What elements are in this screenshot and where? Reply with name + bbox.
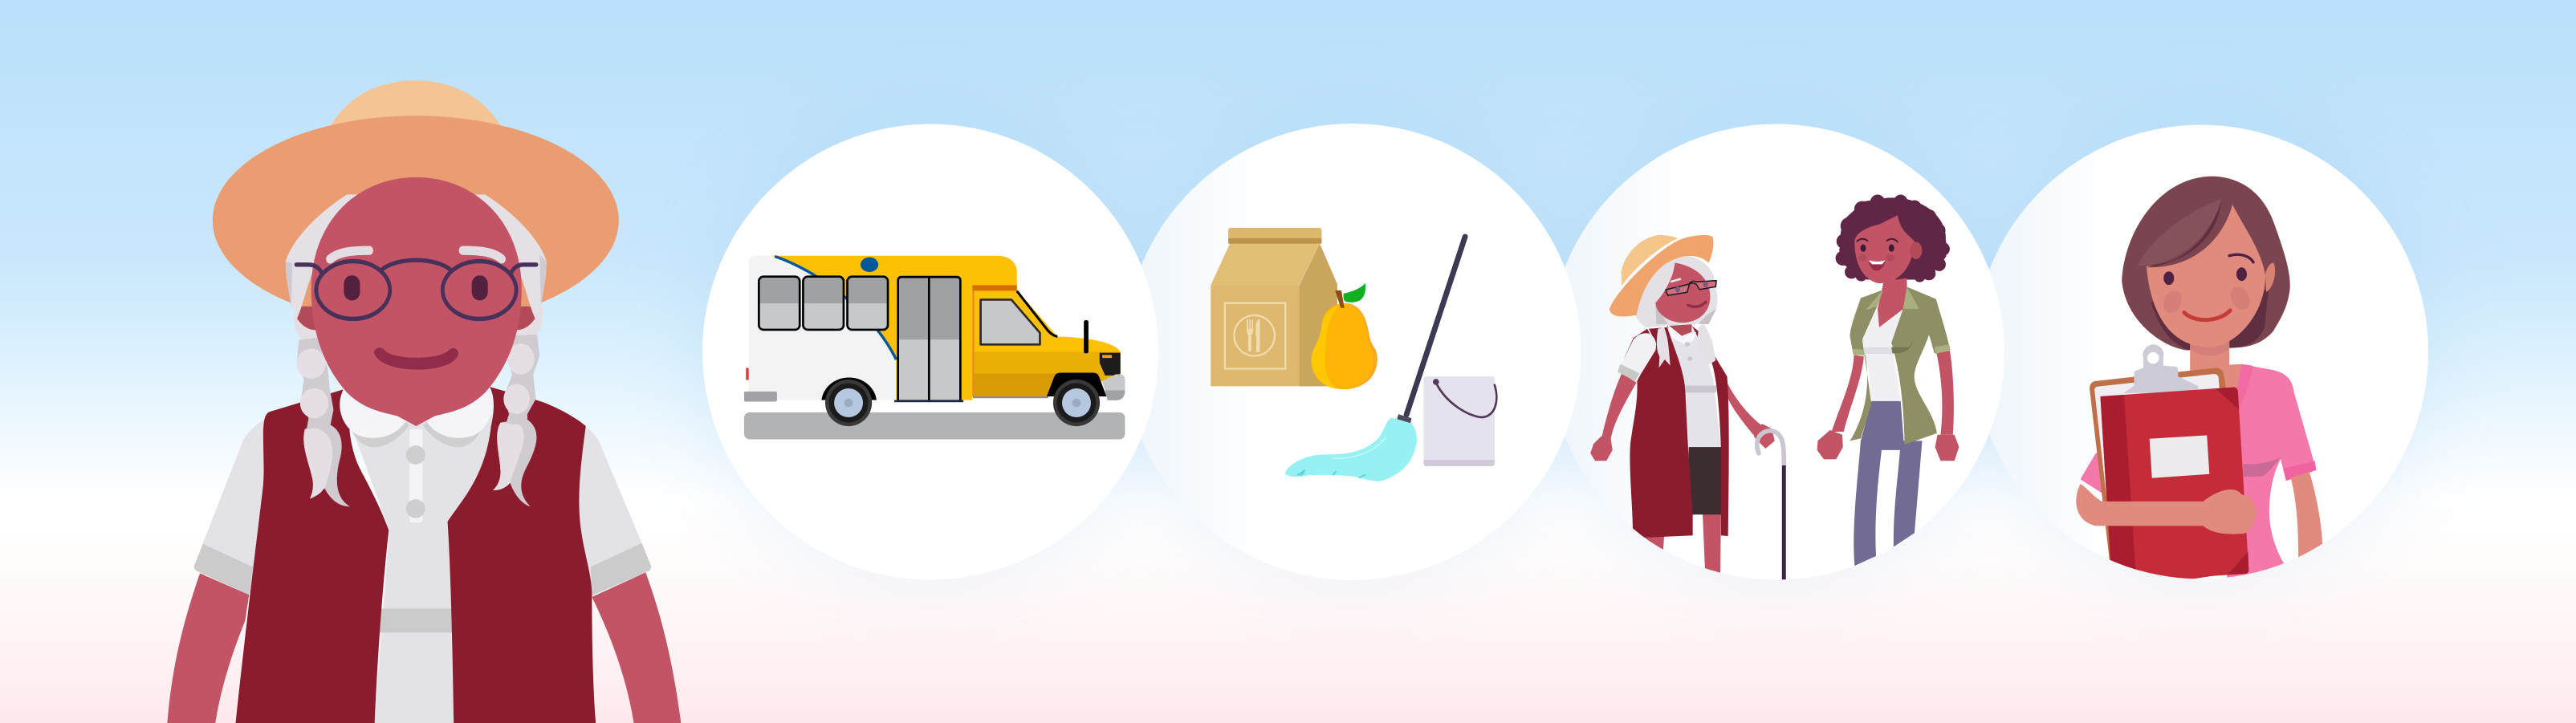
windows [759, 277, 888, 330]
eyebrows [330, 250, 502, 259]
icon: pear [1311, 283, 1378, 389]
eyes [344, 275, 488, 300]
illustration: nurse with binder [2076, 177, 2322, 582]
collar [340, 390, 492, 447]
icon: meal bag [1211, 228, 1337, 386]
shirt [194, 414, 651, 723]
road [744, 412, 1125, 440]
right braid [493, 307, 543, 506]
panel: circle 2 meals and housekeeping [1124, 124, 1581, 580]
figure: older woman with cane [1590, 235, 1784, 580]
soft glow behind circles [714, 123, 2418, 556]
illustration: meal bag, pear, mop and bucket [1211, 228, 1496, 481]
hair and ears [286, 194, 547, 330]
door [894, 277, 963, 402]
mouth [374, 347, 458, 370]
hat brim [213, 116, 619, 325]
panel: circle 1 transport [702, 124, 1158, 579]
hat crown [331, 80, 501, 126]
illustration: older woman and caregiver [1590, 195, 1959, 580]
face [311, 177, 522, 426]
vest [235, 387, 596, 723]
illustration: yellow shuttle bus [744, 256, 1125, 440]
icon: bucket [1423, 376, 1496, 466]
panel: circle 3 companionship [1548, 124, 2004, 580]
figure: caregiver with curly hair [1817, 195, 1959, 566]
front wheel [1053, 380, 1100, 426]
cab [972, 285, 1125, 400]
icon: mop [1285, 237, 1465, 481]
left braid [293, 315, 350, 506]
panel: circle 4 care coordinator [1974, 125, 2428, 582]
figure: large older woman portrait [167, 80, 681, 723]
arms [167, 572, 681, 723]
glasses [296, 260, 536, 319]
rear wheel [825, 380, 872, 426]
